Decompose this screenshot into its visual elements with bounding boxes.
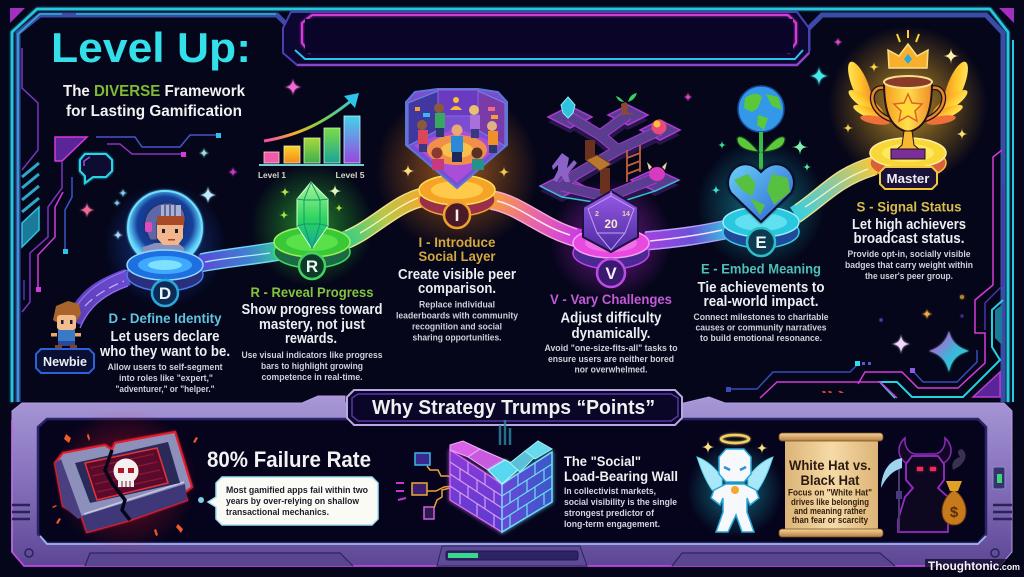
text block: social wall: The "Social" (564, 453, 641, 469)
icon: broken game cartridge (52, 408, 204, 552)
text block: social wall: long-term engagement. (564, 519, 660, 529)
icon: speech bubble (80, 154, 112, 183)
text block: I: Social Layer (418, 248, 496, 264)
callout: failure explanation (208, 477, 378, 525)
icon: white hat angel (687, 435, 783, 538)
scroll: white hat vs black hat (779, 433, 883, 537)
text block: R: bars to highlight growing (261, 361, 363, 371)
top empty title panel (283, 12, 809, 65)
icon: d20 die: 20 (604, 217, 618, 231)
text block: I: comparison. (418, 281, 496, 297)
badge: master (880, 167, 937, 189)
bar chart: level progress (258, 93, 365, 180)
text block: social wall (564, 453, 678, 529)
text block: S: badges that carry weight within (845, 260, 973, 270)
icon: skull (114, 458, 138, 487)
icon: black hat devil: $ (950, 504, 959, 521)
watermark: thoughtonic.com: Thoughtonic.com (928, 559, 1020, 573)
text block: S (845, 198, 973, 281)
text block: S: Let high achievers (852, 217, 966, 233)
badge: R: R (306, 257, 318, 276)
bar chart: level progress: Level 1 (258, 170, 286, 180)
progress path ribbon (70, 157, 875, 328)
callout: failure explanation: years by over-relying on shallow (226, 496, 360, 507)
callout: failure explanation: Most gamified apps fail within two (226, 485, 368, 496)
node I: introduce social layer (401, 89, 510, 228)
text block: E: E - Embed Meaning (701, 260, 821, 276)
text block: S: Provide opt-in, socially visible (848, 249, 970, 259)
text block: V: dynamically. (572, 326, 650, 342)
node E: embed meaning (711, 86, 812, 256)
badge: V: V (605, 264, 617, 283)
badge: newbie (36, 349, 94, 373)
badge: V (597, 259, 625, 287)
glow halos (103, 25, 988, 307)
text block: D (99, 310, 230, 394)
scroll: white hat vs black hat: Black Hat (800, 473, 860, 488)
text block: D: "adventurer," or "helper." (116, 384, 214, 394)
icon: newbie character (51, 301, 81, 348)
node D: define identity (127, 191, 203, 306)
icon: winged trophy and crown (842, 30, 973, 159)
text block: social wall: strongest predictor of (564, 508, 655, 518)
heading tab: Why Strategy Trumps “Points” (372, 397, 655, 419)
text block: R: Use visual indicators like progress (242, 350, 382, 360)
icon: d20 die (583, 191, 638, 252)
text block: D: who they want to be. (99, 344, 230, 360)
sparkles (79, 38, 964, 354)
right circuit decoration (726, 150, 1003, 398)
text block: R (242, 284, 382, 382)
text block: I: recognition and social (412, 322, 502, 332)
text block: V: V - Vary Challenges (550, 291, 672, 307)
text block: D: Allow users to self-segment (108, 362, 222, 372)
icon: d20 die: 2 (595, 211, 599, 218)
text block: D: into roles like "expert," (119, 373, 213, 383)
text block: V: ensure users are neither bored (548, 354, 674, 364)
icon: globe heart and sprout (711, 86, 812, 222)
icon: isometric challenge map (540, 93, 680, 204)
icon: social room (401, 89, 510, 188)
scroll: white hat vs black hat: and meaning rather (794, 506, 866, 516)
text block: R: competence in real-time. (262, 372, 362, 382)
text block: R: mastery, not just (259, 317, 365, 333)
badge: D: D (159, 284, 171, 303)
text block: E: Connect milestones to charitable (694, 312, 828, 322)
text block: R: R - Reveal Progress (250, 284, 374, 300)
text block: social wall: Load-Bearing Wall (564, 468, 678, 484)
text block: I (396, 234, 519, 342)
text block: V: nor overwhelmed. (574, 364, 648, 374)
text block: V (544, 291, 678, 374)
icon: four-point star (929, 331, 969, 372)
badge: E (747, 228, 775, 256)
text block: I: Replace individual (419, 300, 495, 310)
node S: signal status (842, 30, 973, 189)
subtitle (63, 83, 245, 120)
text block: R: Show progress toward (242, 302, 382, 318)
icon: d20 die: 14 (622, 211, 630, 218)
node R: reveal progress (274, 182, 350, 279)
text block: E: Tie achievements to (698, 280, 825, 296)
left circuit decoration (22, 48, 221, 312)
icon: green crystal (279, 182, 344, 249)
outer tech frame (10, 8, 1014, 402)
scroll: white hat vs black hat: drives like belonging (791, 497, 869, 507)
icon: black hat devil (881, 438, 966, 532)
bottom panel: why strategy trumps points (12, 396, 1012, 566)
text block: E: real-world impact. (704, 294, 818, 310)
heading tab (347, 390, 682, 425)
text block: V: Adjust difficulty (560, 310, 662, 326)
text block: social wall: In collectivist markets, (564, 486, 656, 496)
text block: D: D - Define Identity (108, 310, 222, 326)
text block: I: Create visible peer (398, 267, 516, 283)
badge: E: E (755, 233, 767, 252)
badge: master: Master (886, 171, 930, 186)
text block: E (694, 260, 828, 343)
icon: knight in crystal sphere (128, 191, 202, 265)
subtitle: The DIVERSE Framework (63, 83, 245, 100)
stat: 80% failure rate: 80% Failure Rate (207, 447, 371, 472)
text block: E: to build emotional resonance. (700, 333, 822, 343)
text block: social wall: social visibility is the single (564, 497, 677, 507)
scroll: white hat vs black hat: White Hat vs. (789, 458, 871, 473)
scroll: white hat vs black hat: Focus on "White Hat" (788, 488, 872, 498)
icon: circuit nodes into wall (396, 453, 470, 519)
text block: R: rewards. (285, 331, 337, 347)
title: Level Up: (51, 24, 251, 71)
text block: I: leaderboards with community (396, 310, 519, 320)
callout: failure explanation: transactional mechanics. (226, 507, 329, 518)
text block: S: broadcast status. (854, 231, 964, 247)
text block: I: sharing opportunities. (412, 332, 502, 342)
badge: I: I (455, 206, 459, 225)
text block: D: Let users declare (110, 329, 220, 345)
subtitle: for Lasting Gamification (66, 103, 242, 120)
text block: V: Avoid "one-size-fits-all" tasks to (544, 343, 678, 353)
bar chart: level progress: Level 5 (336, 170, 365, 180)
badge: newbie: Newbie (43, 355, 87, 369)
text block: I: I - Introduce (418, 234, 496, 250)
icon: social load-bearing wall (450, 420, 552, 532)
text block: S: the user's peer group. (865, 271, 953, 281)
text block: S: S - Signal Status (856, 198, 962, 214)
node V: vary challenges (540, 93, 680, 287)
scroll: white hat vs black hat: than fear or scarcity (792, 515, 868, 525)
text block: E: causes or community narratives (696, 322, 826, 332)
